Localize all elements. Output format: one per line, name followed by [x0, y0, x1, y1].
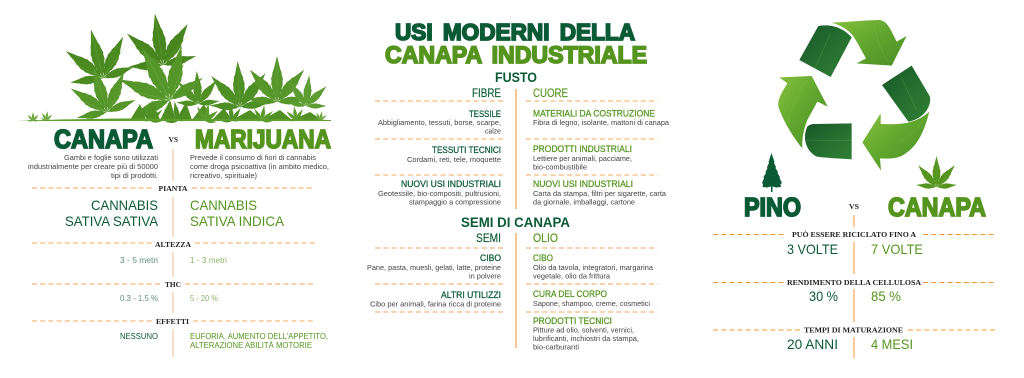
item: cibo olio: CIBO [533, 253, 553, 263]
item: cibo olio: Olio da tavola, integratori, margarina [533, 263, 654, 272]
item: prodotti tecnici [533, 316, 639, 352]
item: prodotti tecnici: bio-carburanti [533, 342, 579, 352]
title: marijuana: MARIJUANA [195, 124, 331, 154]
heading: canapa industriale: CANAPA INDUSTRIALE [385, 42, 647, 69]
item: materiali da costruzione: MATERIALI DA COSTRUZIONE [533, 108, 655, 118]
text: marijuana description: ricreativo, spirituale) [190, 171, 257, 180]
icon: recycling symbol made of leaves [778, 20, 930, 171]
section rule: maturazione: TEMPI DI MATURAZIONE [804, 328, 904, 334]
item: altri utilizzi [370, 290, 501, 308]
icon: cannabis leaf [915, 156, 958, 190]
heading: usi moderni della: USI MODERNI DELLA [395, 19, 635, 45]
value: canapa maturation time: 4 MESI [871, 336, 913, 352]
value: marijuana effects: EUFORIA, AUMENTO DELL'APPETITO, [190, 332, 328, 341]
values: marijuana plant species: CANNABIS [190, 197, 257, 213]
item: nuovi usi industriali fibre: stampaggio a compressione [409, 198, 501, 206]
item: cibo semi [367, 253, 501, 280]
section rule: cellulosa: RENDIMENTO DELLA CELLULOSA [787, 280, 921, 287]
item: prodotti tecnici: PRODOTTI TECNICI [533, 316, 612, 326]
value: canapa recycling: 7 VOLTE [871, 241, 923, 257]
item: cura del corpo: Sapone, shampoo, creme, cosmetici [533, 299, 650, 308]
section rule: riciclo: PUÒ ESSERE RICICLATO FINO A [792, 231, 916, 239]
value: marijuana thc: 5 - 20 % [190, 294, 218, 303]
values: marijuana plant species [190, 197, 285, 229]
title: canapa: CANAPA [888, 192, 986, 222]
values: canapa plant species: CANNABIS [91, 197, 158, 213]
column head: fibre: FIBRE [472, 88, 501, 100]
item: cura del corpo: CURA DEL CORPO [533, 289, 607, 299]
section rule: pianta: PIANTA [158, 186, 188, 193]
values: canapa plant species [65, 197, 159, 229]
title: pino: PINO [744, 192, 801, 222]
item: cibo olio [533, 253, 654, 280]
text: canapa description: Gambi e foglie sono utilizzati [64, 153, 158, 162]
item: materiali da costruzione [533, 108, 670, 127]
column head: olio: OLIO [533, 233, 558, 245]
value: canapa effects: NESSUNO [120, 332, 158, 341]
subheading: semi di canapa: SEMI DI CANAPA [461, 215, 570, 230]
item: tessile: TESSILE [469, 109, 501, 119]
vs label: VS [849, 202, 859, 211]
item: cibo olio: vegetale, olio da frittura [533, 272, 611, 280]
text: canapa description [28, 153, 158, 180]
value: pino cellulose yield: 30 % [809, 288, 838, 304]
item: cura del corpo [533, 289, 650, 308]
item: cibo semi: Pane, pasta, muesli, gelati, latte, proteine [367, 263, 501, 272]
item: nuovi usi industriali fibre: Geotessile, bio-compositi, pultrusioni, [378, 189, 501, 198]
item: prodotti industriali: bio-combustibile [533, 162, 587, 172]
item: prodotti industriali [533, 144, 632, 172]
item: cibo semi: CIBO [480, 253, 501, 263]
section rule: thc: THC [165, 282, 181, 289]
item: prodotti industriali: PRODOTTI INDUSTRIALI [533, 144, 632, 154]
values: marijuana plant species: SATIVA INDICA [190, 213, 285, 229]
item: nuovi usi industriali cuore [533, 179, 667, 206]
item: nuovi usi industriali fibre [378, 179, 501, 206]
value: marijuana effects: ALTERAZIONE ABILITÀ MOTORIE [190, 341, 312, 350]
icon: pine tree [762, 153, 782, 192]
panel: canapa vs marijuana [16, 8, 331, 357]
illustration: cannabis plants [16, 8, 331, 125]
value: pino maturation time: 20 ANNI [787, 336, 838, 352]
divider: intro [172, 149, 174, 181]
vs label: VS [168, 135, 178, 144]
value: canapa thc: 0.3 - 1.5 % [120, 294, 158, 303]
item: nuovi usi industriali cuore: da giornale, imballaggi, cartone [533, 198, 635, 206]
values: canapa plant species: SATIVA SATIVA [65, 213, 159, 229]
item: prodotti tecnici: lubrificanti, inchiostri da stampa, [533, 334, 639, 343]
item: materiali da costruzione: Fibra di legno, isolante, mattoni di canapa [533, 118, 670, 127]
value: canapa height: 3 - 5 metri [120, 256, 158, 265]
text: marijuana description: Prevede il consumo di fiori di cannabis [190, 153, 316, 162]
text: marijuana description [190, 153, 329, 180]
value: marijuana height: 1 - 3 metri [190, 256, 227, 265]
value: marijuana effects [190, 332, 328, 350]
column head: cuore: CUORE [533, 88, 568, 100]
section rule: altezza: ALTEZZA [155, 242, 191, 249]
item: prodotti industriali: Lettiere per animali, pacciame, [533, 154, 632, 163]
subheading: fusto: FUSTO [495, 69, 537, 85]
text: marijuana description: come droga psicoattiva (in ambito medico, [190, 162, 329, 171]
value: pino recycling: 3 VOLTE [787, 241, 838, 257]
title: canapa: CANAPA [54, 124, 153, 154]
item: cibo semi: in polvere [469, 272, 501, 280]
item: nuovi usi industriali cuore: NUOVI USI INDUSTRIALI [533, 179, 633, 189]
section rule: effetti: EFFETTI [156, 319, 189, 326]
text: canapa description: industrialmente per creare più di 50000 [28, 162, 158, 171]
item: tessile: calze [485, 126, 501, 136]
panel: usi moderni [367, 19, 670, 352]
panel: pino vs canapa [713, 20, 996, 358]
item: tessuti tecnici [407, 145, 501, 164]
column head: semi: SEMI [476, 233, 501, 245]
item: altri utilizzi: ALTRI UTILIZZI [441, 290, 501, 300]
item: tessuti tecnici: TESSUTI TECNICI [432, 145, 501, 155]
item: tessile [378, 109, 501, 136]
item: tessile: Abbigliamento, tessuti, borse, scarpe, [378, 118, 501, 127]
value: canapa cellulose yield: 85 % [871, 288, 901, 304]
text: canapa description: tipi di prodotti. [111, 171, 158, 180]
item: tessuti tecnici: Cordami, reti, tele, moquette [407, 155, 501, 164]
item: altri utilizzi: Cibo per animali, farina ricca di proteine [370, 300, 501, 308]
item: nuovi usi industriali cuore: Carta da stampa, filtri per sigarette, carta [533, 189, 667, 198]
item: nuovi usi industriali fibre: NUOVI USI INDUSTRIALI [401, 179, 501, 189]
item: prodotti tecnici: Pitture ad olio, solventi, vernici, [533, 326, 634, 334]
